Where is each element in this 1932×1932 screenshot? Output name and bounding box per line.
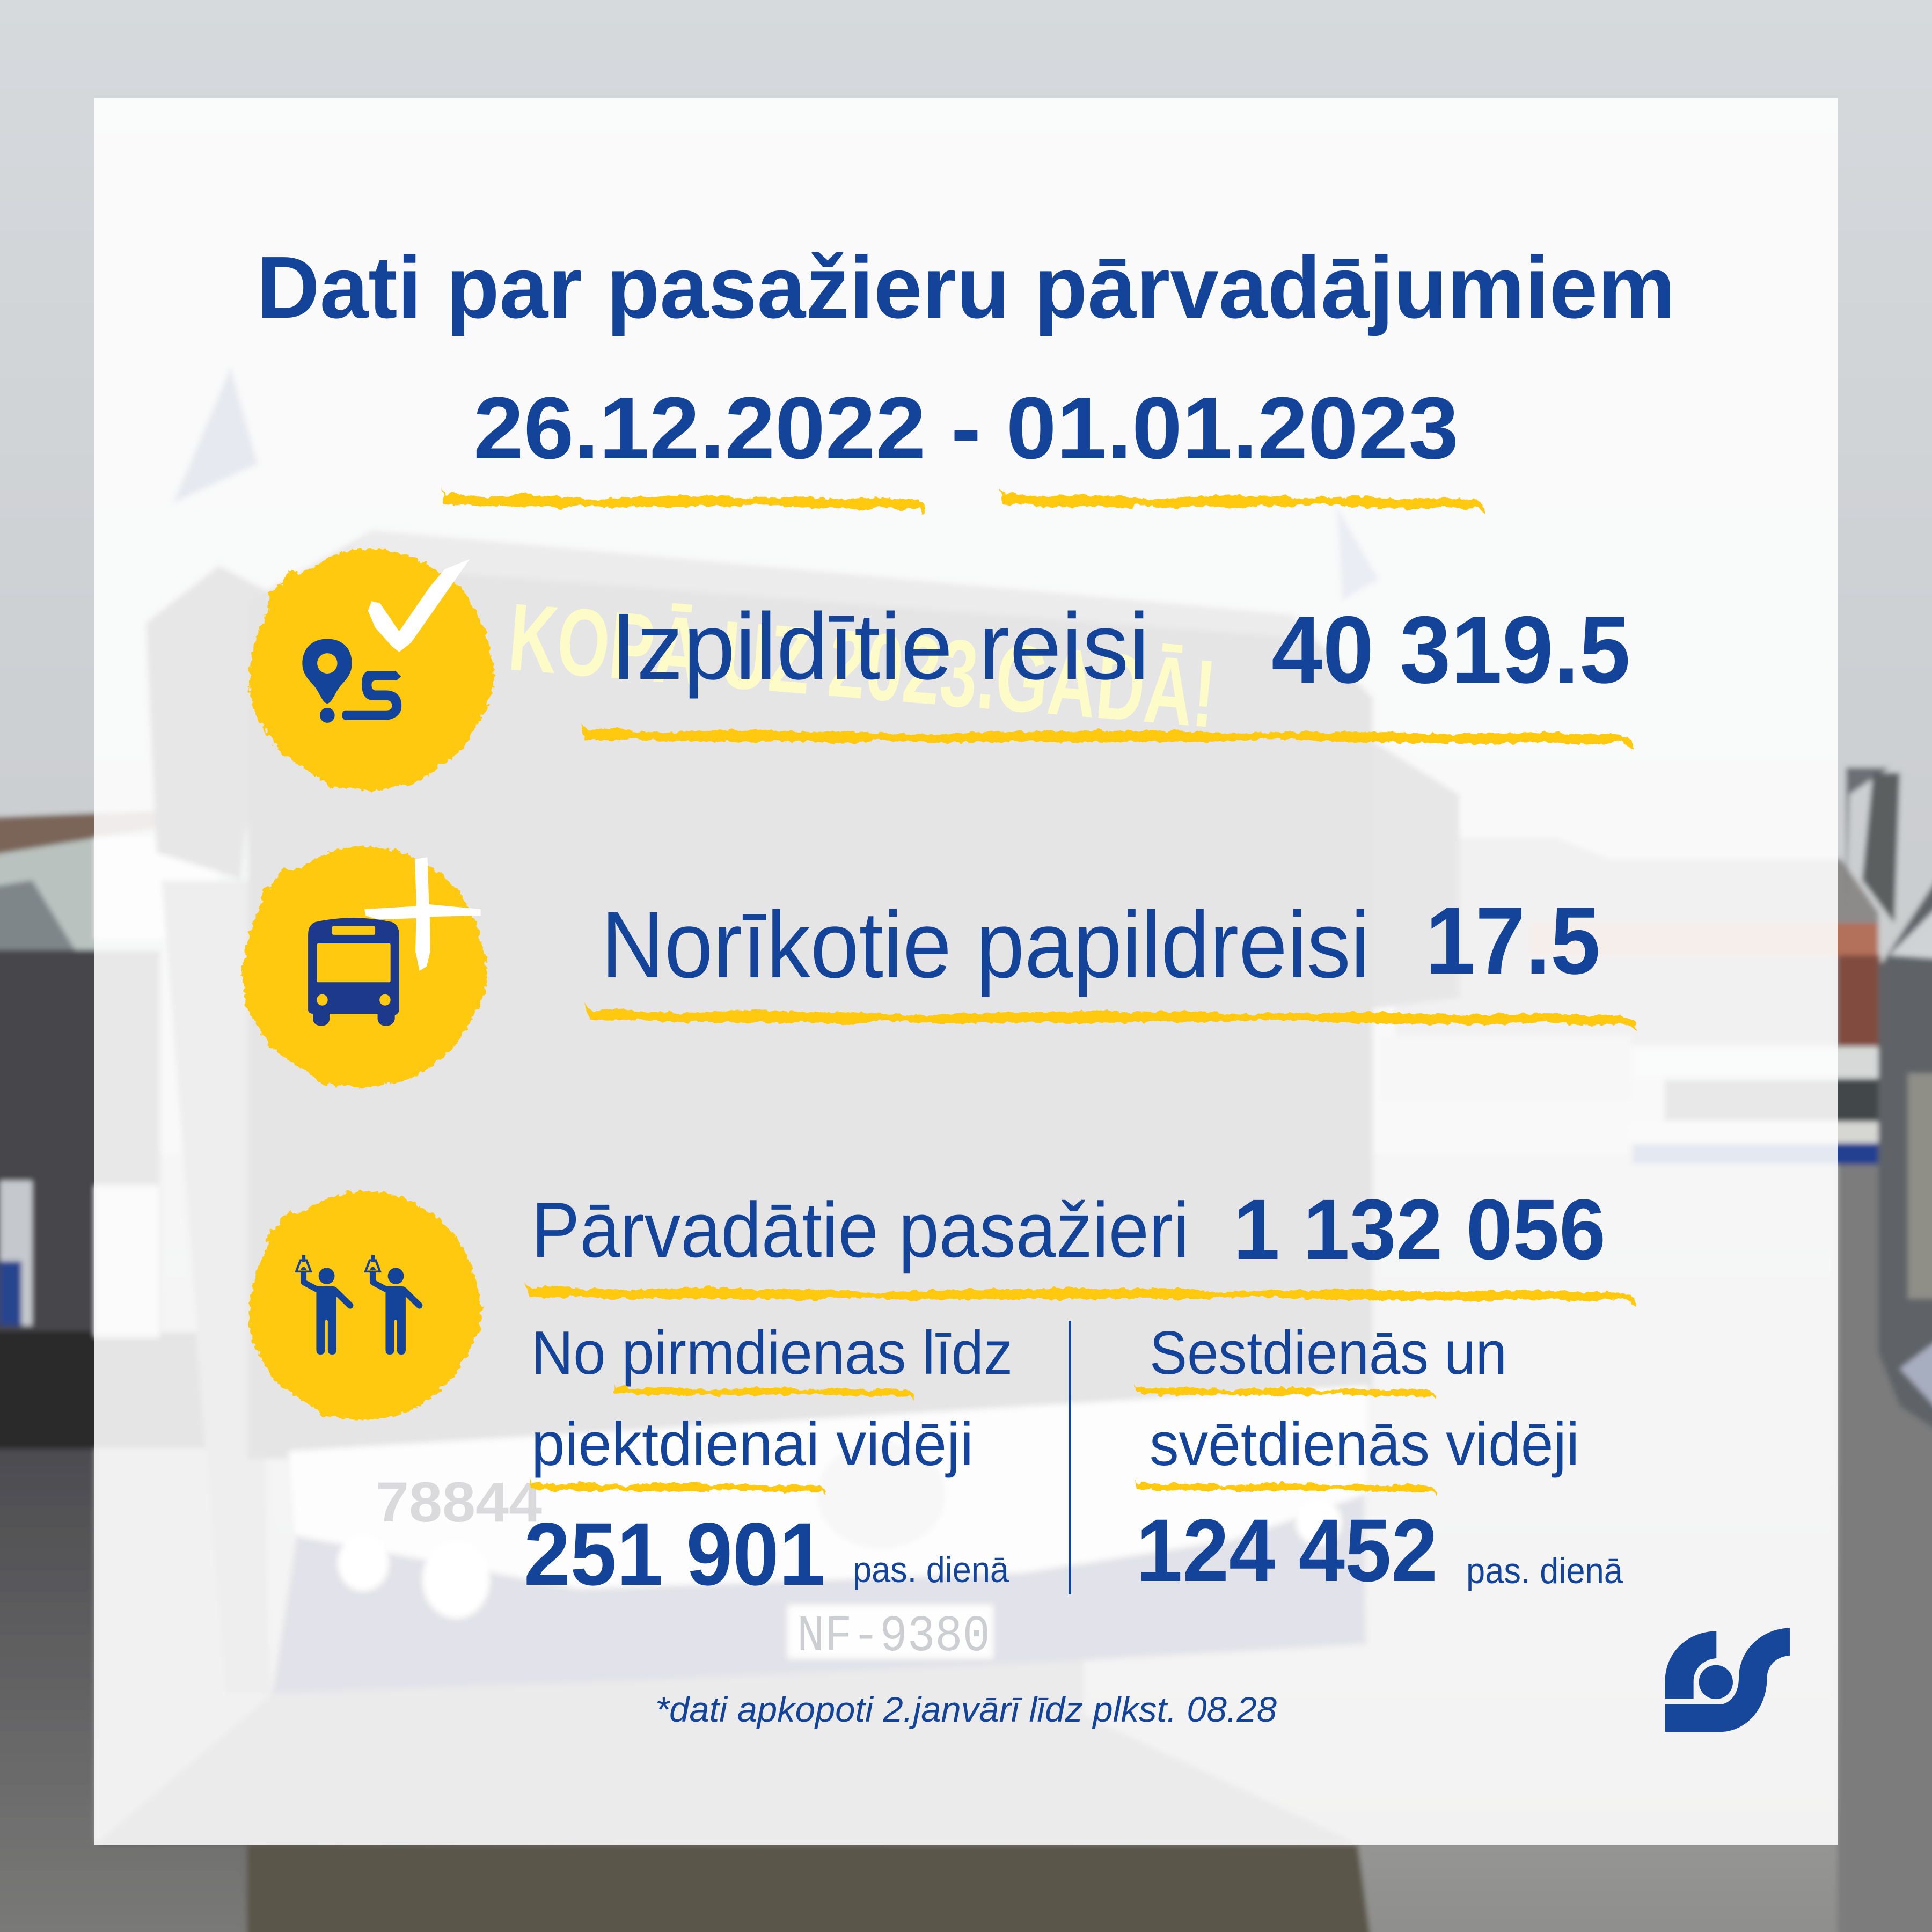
value: 1 132 056 [1233, 1181, 1606, 1277]
weekdays underline 1 [613, 1382, 914, 1401]
logo [1665, 1628, 1790, 1732]
weekdays underline 2 [530, 1479, 825, 1496]
weekend block [1135, 1319, 1623, 1600]
value: 17.5 [1425, 887, 1600, 994]
row 3: passengers carried [249, 1181, 1636, 1421]
photo detail: bus number: 78844 [376, 1471, 542, 1534]
weekdays block [524, 1319, 1013, 1604]
divider [1069, 1321, 1071, 1594]
weekdays value: 251 901 [524, 1505, 825, 1604]
row 2: additional trips [243, 846, 1636, 1088]
weekdays line 2: piektdienai vidēji [531, 1410, 974, 1479]
underline [524, 1281, 1636, 1307]
weekend underline 2 [1135, 1479, 1436, 1496]
weekdays line 1: No pirmdienas līdz [531, 1319, 1013, 1387]
date underline left [442, 488, 925, 515]
weekend line 1: Sestdienās un [1150, 1319, 1507, 1387]
icon: bus with plus [243, 846, 487, 1088]
underline [585, 1004, 1636, 1030]
title [257, 238, 1675, 477]
footnote: *dati apkopoti 2.janvārī līdz plkst. 08.28 [655, 1689, 1277, 1729]
label: Norīkotie papildreisi [601, 892, 1370, 998]
weekend value: 124 452 [1136, 1501, 1438, 1600]
photo detail: bus destination display: KOPĀ UZ 2023.GADĀ! [505, 583, 1220, 748]
underline [580, 723, 1634, 750]
row 1: completed trips [250, 548, 1634, 791]
heading line 1: Dati par pasažieru pārvadājumiem [257, 238, 1675, 336]
photo detail: license plate: NF-9380 [797, 1607, 990, 1666]
label: Pārvadātie pasažieri [531, 1186, 1189, 1274]
weekdays unit: pas. dienā [853, 1549, 1009, 1590]
weekend line 2: svētdienās vidēji [1150, 1410, 1579, 1479]
weekend underline 1 [1135, 1382, 1436, 1401]
weekend unit: pas. dienā [1466, 1550, 1623, 1591]
icon: two standing passengers [249, 1190, 482, 1421]
label: Izpildītie reisi [611, 594, 1150, 699]
heading line 2: date range: 26.12.2022 - 01.01.2023 [473, 379, 1459, 477]
icon: route with check mark [250, 548, 494, 791]
date underline right [1000, 488, 1484, 515]
value: 40 319.5 [1271, 596, 1630, 703]
